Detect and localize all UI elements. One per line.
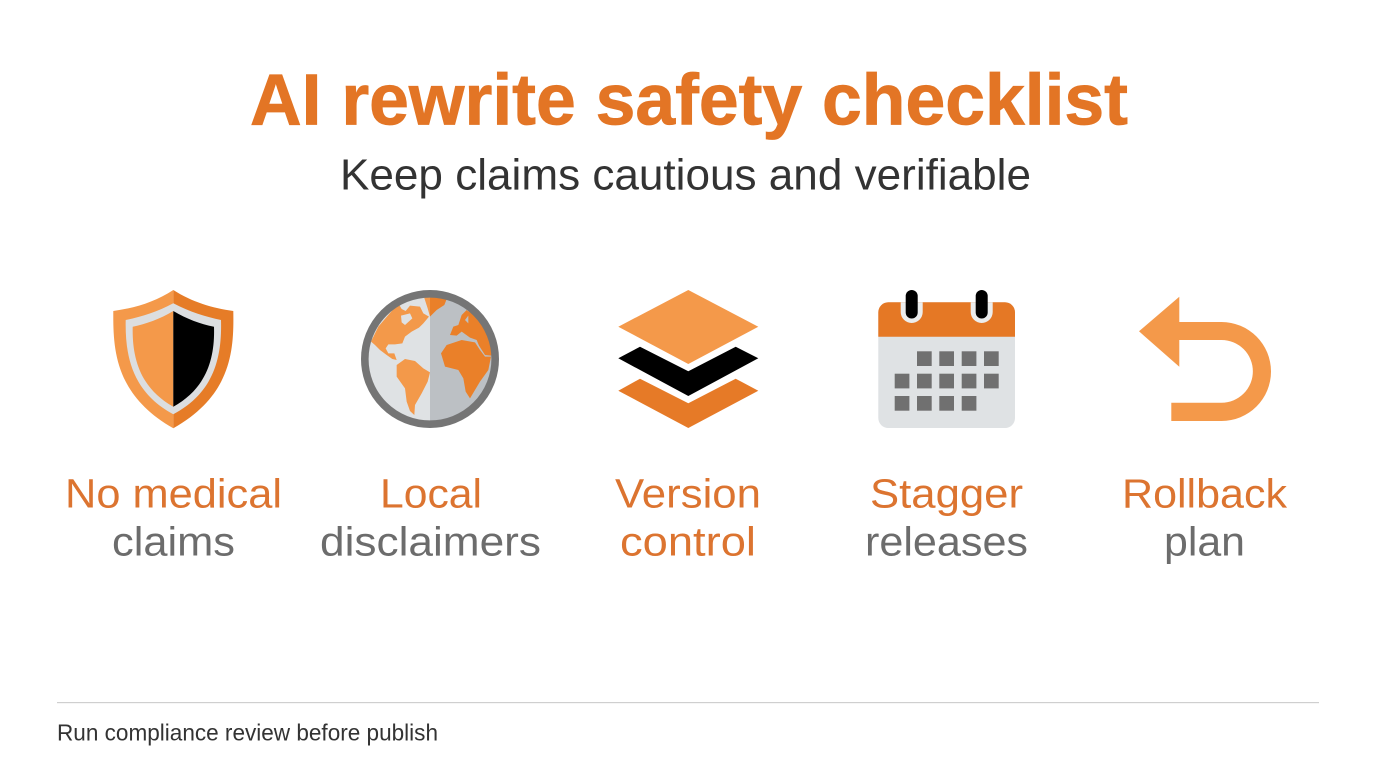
icon: layers [618,290,758,428]
item: rollback plan [1122,297,1288,565]
label: rollback plan: plan [1164,519,1245,565]
label: local disclaimers [320,470,541,565]
label: local disclaimers: Local [380,470,482,516]
subtitle: Keep claims cautious and verifiable [340,150,1031,199]
footer note: Run compliance review before publish [57,720,438,746]
label: local disclaimers: disclaimers [320,519,541,565]
label: rollback plan: Rollback [1122,470,1288,516]
label: stagger releases [865,470,1028,565]
title: AI rewrite safety checklist [250,60,1128,140]
label: version control: control [620,519,756,565]
item: no medical claims [65,290,282,565]
item: local disclaimers [320,294,541,565]
label: stagger releases: Stagger [870,470,1023,516]
icon: calendar [878,290,1015,428]
item: stagger releases [865,290,1028,565]
label: version control: Version [615,470,761,516]
icon: globe [365,294,498,424]
icon: rollback arrow [1139,297,1271,421]
item: version control [615,290,761,565]
label: stagger releases: releases [865,519,1028,565]
label: no medical claims [65,470,282,565]
label: rollback plan [1122,470,1288,565]
icon: shield [113,290,233,428]
label: no medical claims: claims [112,519,235,565]
label: no medical claims: No medical [65,470,282,516]
label: version control [615,470,761,565]
